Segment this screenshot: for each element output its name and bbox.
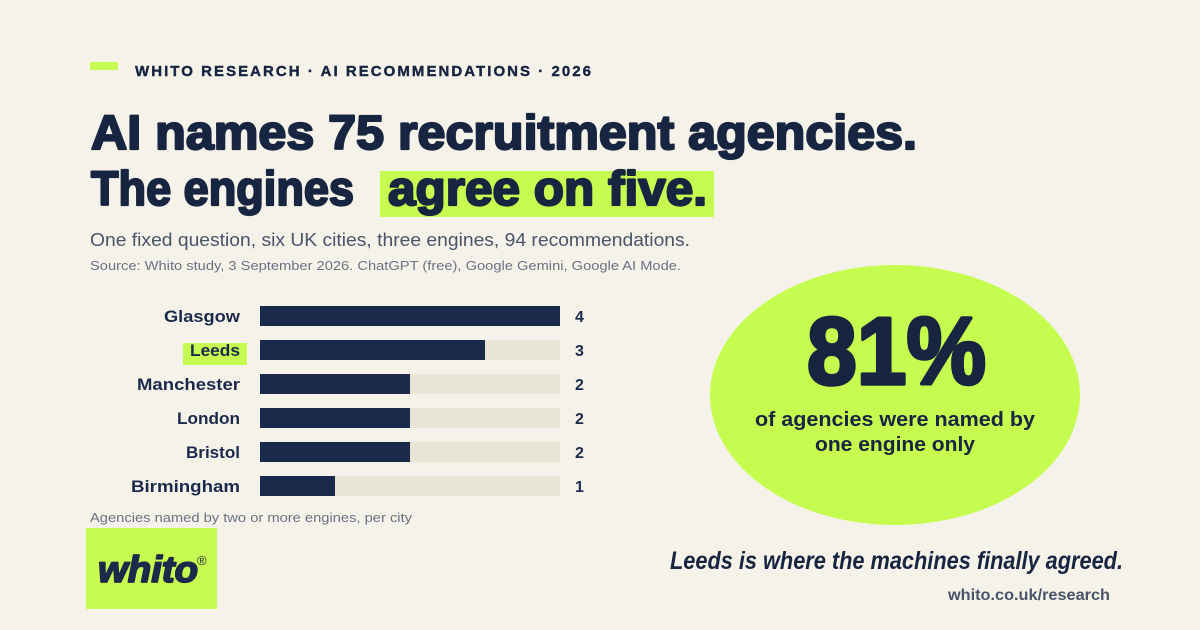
bar: London bbox=[177, 408, 584, 428]
bar: Bristol bbox=[186, 442, 584, 462]
logo: whito bbox=[86, 528, 217, 609]
bar: Manchester: Manchester bbox=[137, 375, 240, 394]
source note: Source: Whito study, 3 September 2026. ChatGPT (free), Google Gemini, Google AI Mode. bbox=[90, 258, 681, 273]
bar: Birmingham: Birmingham bbox=[131, 477, 240, 496]
title: AI names 75 recruitment agencies. bbox=[91, 107, 917, 160]
callout: 81%: 81% bbox=[807, 298, 986, 405]
bar: Birmingham bbox=[131, 476, 584, 496]
bar: Glasgow: Glasgow bbox=[164, 307, 241, 326]
eyebrow: WHITO RESEARCH · AI RECOMMENDATIONS · 2026 bbox=[135, 63, 591, 80]
subtitle: One fixed question, six UK cities, three engines, 94 recommendations. bbox=[90, 230, 690, 250]
callout: 81% bbox=[710, 265, 1080, 525]
bar: Leeds (highlighted): 3 bbox=[575, 343, 584, 360]
bar: London: London bbox=[177, 409, 240, 428]
title bbox=[91, 107, 917, 217]
bar: Bristol: Bristol bbox=[186, 443, 240, 462]
callout: 81%: one engine only bbox=[815, 434, 976, 456]
logo: whito: whito bbox=[98, 549, 198, 590]
chart caption: Agencies named by two or more engines, per city bbox=[90, 510, 413, 525]
tagline: Leeds is where the machines finally agreed. bbox=[670, 547, 1123, 575]
callout: 81%: of agencies were named by bbox=[755, 409, 1036, 431]
bar: Leeds (highlighted) bbox=[183, 340, 584, 365]
title: agree on five. bbox=[388, 163, 707, 216]
bar: London: 2 bbox=[575, 411, 584, 428]
title: The engines bbox=[91, 163, 354, 216]
bar: Manchester: 2 bbox=[575, 377, 584, 394]
bar: Birmingham: 1 bbox=[575, 479, 584, 496]
url: whito.co.uk/research bbox=[947, 587, 1110, 604]
bar: Glasgow: 4 bbox=[575, 309, 584, 326]
logo: whito: ® bbox=[197, 553, 207, 568]
bar: Manchester bbox=[137, 374, 584, 394]
bar: Leeds (highlighted): Leeds bbox=[190, 341, 240, 360]
bar: Glasgow bbox=[164, 306, 584, 326]
bar: Bristol: 2 bbox=[575, 445, 584, 462]
bar chart bbox=[131, 306, 584, 496]
